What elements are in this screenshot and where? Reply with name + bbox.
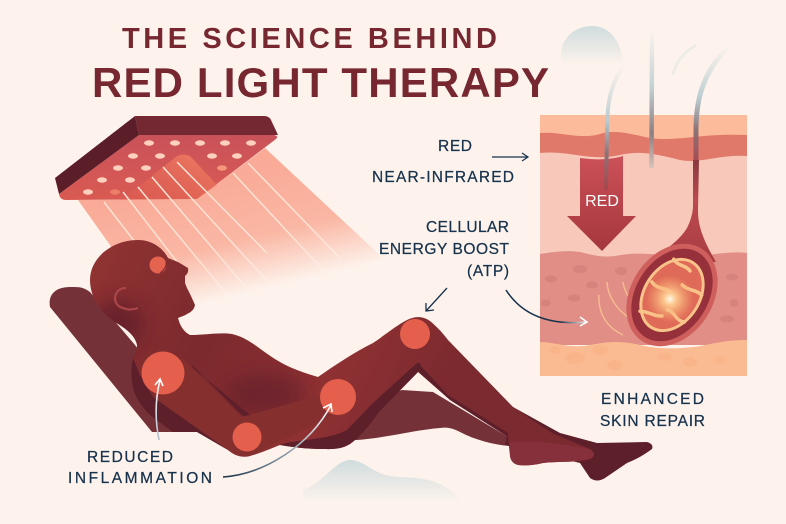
person — [90, 240, 594, 465]
label: red: RED — [438, 138, 472, 155]
label: cellular energy boost — [379, 219, 510, 280]
panel underside — [59, 135, 277, 200]
energy waves — [599, 282, 632, 335]
arrow: to hip — [223, 404, 332, 477]
under-thigh shading — [280, 363, 421, 449]
arrow: RED — [567, 156, 636, 251]
title: RED LIGHT THERAPY — [92, 59, 549, 106]
arrow: red to skin — [492, 153, 528, 161]
far leg — [505, 407, 652, 480]
label: reduced inflammation: REDUCED — [87, 449, 173, 466]
label: cellular energy boost: CELLULAR — [426, 219, 509, 236]
epidermis — [540, 115, 747, 139]
dermis — [540, 152, 747, 256]
title — [92, 23, 549, 106]
spot: hip — [320, 379, 356, 415]
soft shading — [92, 299, 305, 417]
lounge chair — [50, 287, 510, 446]
arrow: ATP to cell — [506, 290, 587, 326]
fat layer — [540, 340, 747, 376]
label: enhanced skin repair — [600, 391, 705, 430]
follicle stalk — [650, 160, 716, 262]
arrow: RED: RED — [585, 193, 619, 210]
LED dots — [83, 140, 256, 195]
spot: shoulder — [142, 352, 184, 394]
label: reduced inflammation — [68, 449, 212, 487]
label: cellular energy boost: (ATP) — [467, 263, 509, 280]
back shading — [131, 358, 228, 450]
light beam — [78, 148, 385, 320]
fog blob: top — [561, 26, 623, 65]
glow patch — [120, 154, 217, 200]
spot: elbow — [232, 422, 262, 452]
mitochondrion — [608, 160, 736, 363]
light rays — [104, 162, 340, 298]
calf shading — [419, 364, 508, 437]
spot: head — [150, 256, 166, 274]
label: enhanced skin repair: SKIN REPAIR — [600, 413, 705, 430]
hair follicles — [606, 30, 730, 190]
light panel device — [55, 116, 278, 200]
label: near-infrared: NEAR-INFRARED — [372, 169, 514, 186]
ear — [115, 288, 138, 310]
arm — [153, 358, 345, 456]
label: reduced inflammation: INFLAMMATION — [68, 470, 212, 487]
body silhouette — [90, 240, 594, 465]
near foot highlight — [510, 442, 594, 465]
cells — [541, 265, 738, 322]
label: cellular energy boost: ENERGY BOOST — [379, 241, 510, 258]
label: enhanced skin repair: ENHANCED — [601, 391, 704, 408]
skin cross-section panel — [540, 115, 747, 376]
title: THE SCIENCE BEHIND — [122, 23, 497, 55]
panel front edge — [135, 116, 278, 135]
lower dermis — [540, 251, 747, 345]
spot: knee — [400, 319, 430, 349]
panel side edge — [55, 116, 139, 194]
arm crease — [192, 365, 250, 416]
arrow: to knee — [426, 288, 447, 311]
fog blob: bottom — [303, 460, 460, 502]
arrow: to shoulder — [155, 379, 163, 440]
wavy band — [540, 132, 747, 161]
fat cells — [549, 345, 726, 370]
